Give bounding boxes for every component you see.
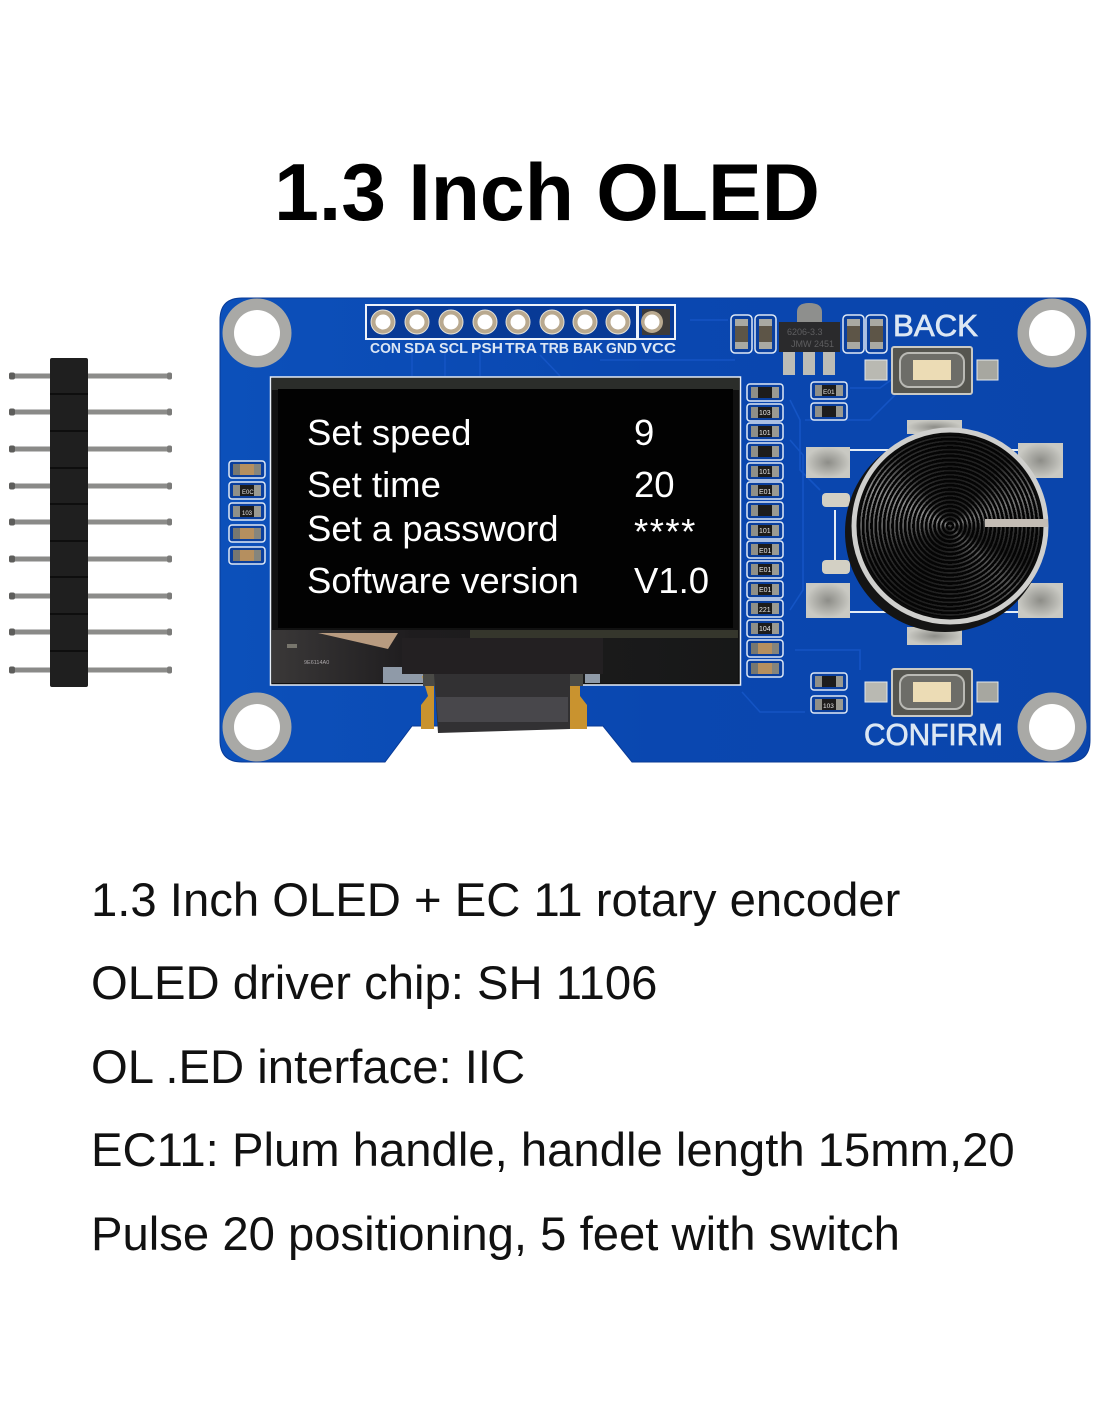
menu text: Set time	[307, 464, 441, 505]
pin labels: CON	[370, 341, 401, 357]
component column: 101	[759, 430, 771, 437]
circuit board	[220, 298, 1090, 762]
pin labels: BAK	[573, 341, 603, 357]
board outline	[220, 298, 1090, 762]
OLED module	[270, 377, 740, 733]
specification text: OLED driver chip: SH 1106	[91, 957, 657, 1010]
component column: 103	[759, 410, 771, 417]
rotary encoder pads	[806, 420, 1063, 645]
glass lower area: 9E6114A0	[304, 660, 329, 666]
small components	[811, 382, 847, 713]
specification text: Pulse 20 positioning, 5 feet with switch	[91, 1208, 900, 1261]
pin header	[9, 358, 172, 687]
left capacitors: E0C	[242, 490, 254, 496]
label: confirm: CONFIRM	[864, 717, 1003, 752]
component column: E01	[759, 567, 772, 574]
menu text: V1.0	[634, 560, 709, 601]
specification text: OL .ED interface: IIC	[91, 1041, 525, 1094]
component column: E01	[759, 587, 772, 594]
menu text: 20	[634, 464, 675, 505]
specification text: EC11: Plum handle, handle length 15mm,20	[91, 1124, 1015, 1177]
pin labels: PSH	[471, 341, 503, 357]
menu text: Software version	[307, 560, 579, 601]
small components: E01	[823, 389, 835, 396]
button: back	[865, 347, 998, 394]
component column: 101	[759, 469, 771, 476]
menu text: Set a password	[307, 508, 559, 549]
component column: E01	[759, 548, 772, 555]
glass lower area	[272, 630, 738, 683]
menu text: ****	[634, 511, 697, 552]
left capacitors	[229, 461, 265, 564]
voltage regulator and capacitors	[731, 303, 887, 375]
component column	[747, 384, 783, 677]
knob indicator	[985, 519, 1048, 527]
pin holes row	[366, 305, 675, 339]
pin labels: SCL	[439, 341, 468, 357]
menu text: Set speed	[307, 412, 471, 453]
left capacitors: 103	[242, 511, 253, 517]
component column: 101	[759, 528, 771, 535]
rotary encoder knob	[845, 430, 1048, 632]
pin labels: TRB	[540, 341, 569, 357]
component column: 104	[759, 626, 771, 633]
menu text: 9	[634, 412, 654, 453]
pin labels: VCC	[641, 341, 677, 357]
component column: 221	[759, 607, 771, 614]
menu text	[307, 412, 709, 601]
small components: 103	[823, 703, 834, 710]
title: 1.3 Inch OLED	[274, 148, 820, 238]
pin labels: GND	[606, 341, 637, 357]
flex cable	[402, 638, 603, 733]
pin labels	[370, 341, 677, 357]
button: confirm	[865, 669, 998, 716]
pin labels: SDA	[404, 341, 437, 357]
specification text: 1.3 Inch OLED + EC 11 rotary encoder	[91, 874, 900, 927]
voltage regulator and capacitors: 6206-3.3	[787, 327, 823, 337]
display	[278, 389, 733, 628]
mounting holes	[222, 298, 1086, 762]
specification text	[91, 874, 1015, 1261]
voltage regulator and capacitors: JMW 2451	[791, 339, 834, 349]
pin labels: TRA	[505, 341, 538, 357]
component column: E01	[759, 489, 772, 496]
label: back: BACK	[893, 309, 978, 343]
